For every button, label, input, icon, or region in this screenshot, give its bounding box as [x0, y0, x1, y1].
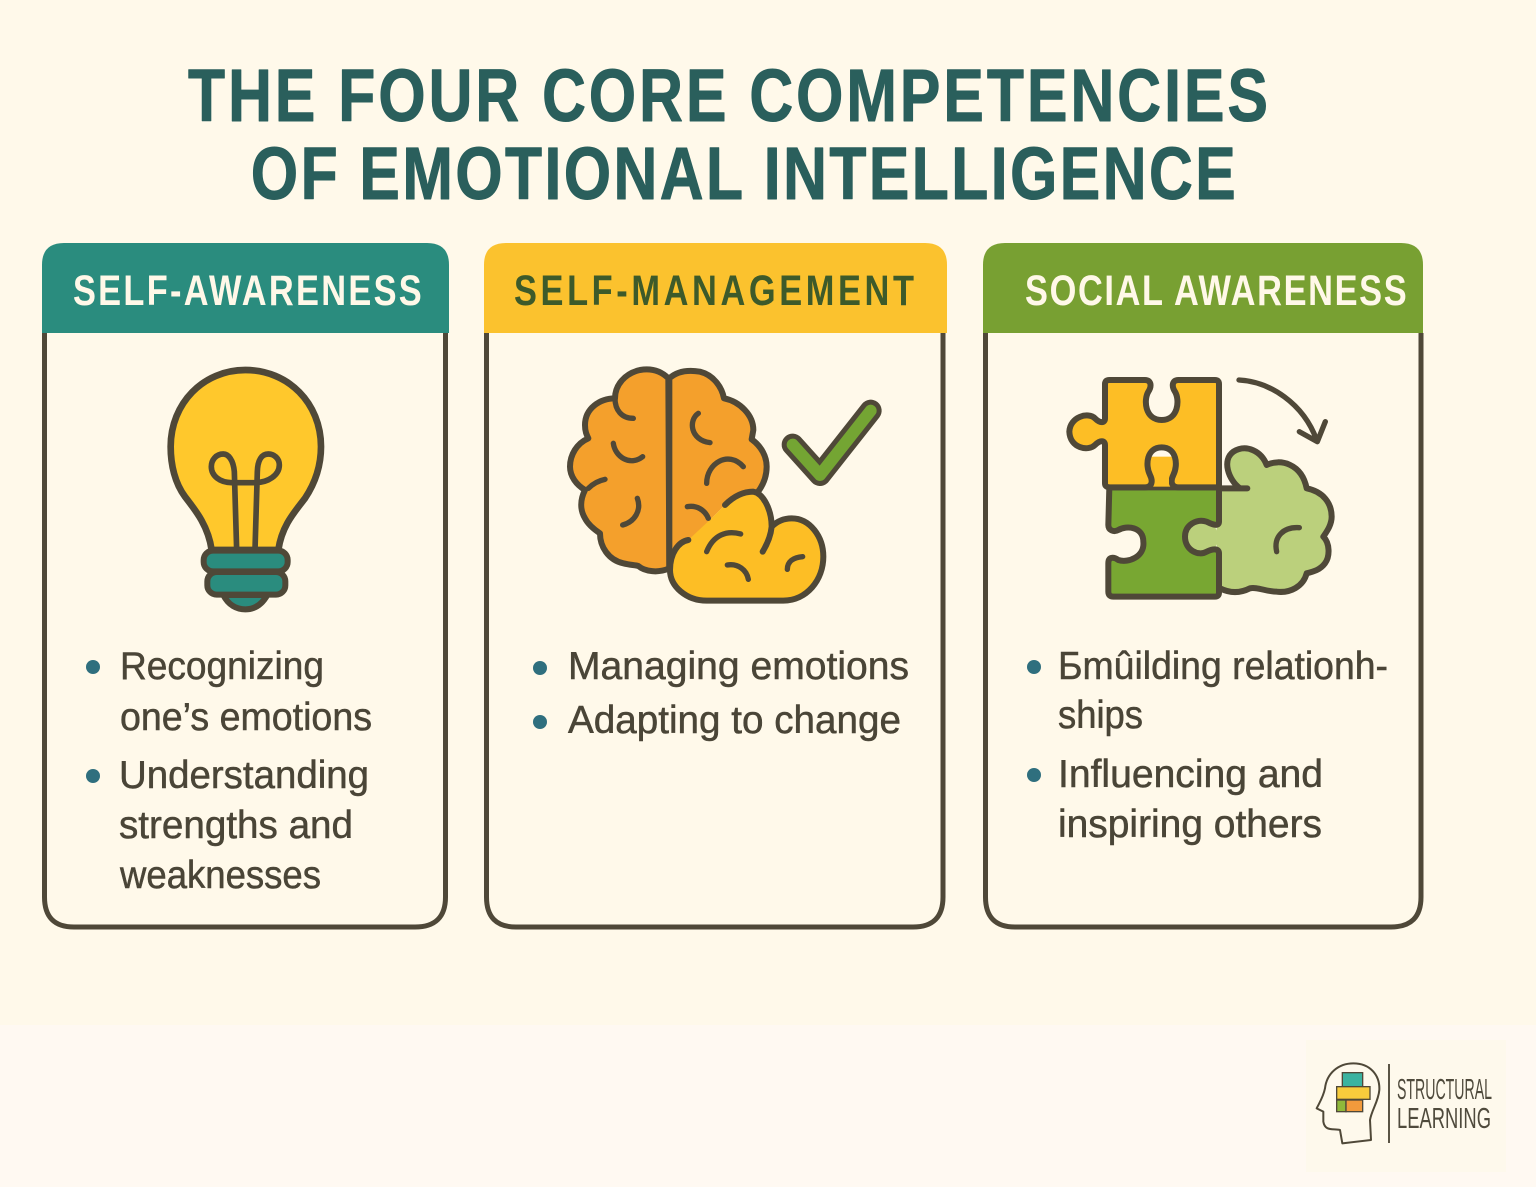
list: social awareness: ships — [1058, 694, 1143, 737]
panel: self-management — [484, 243, 947, 927]
list: social awareness — [1027, 645, 1388, 846]
list: self-management: Adapting to change — [568, 699, 901, 742]
panel: self-awareness — [42, 243, 449, 927]
list: self-awareness: weaknesses — [119, 854, 321, 897]
icon: brain with check mark — [570, 369, 871, 601]
list: self-awareness: strengths and — [119, 804, 353, 847]
header: self-awareness: SELF-AWARENESS — [73, 267, 422, 315]
title: THE FOUR CORE COMPETENCIES — [188, 55, 1268, 137]
light green brain piece — [1185, 448, 1332, 592]
list: social awareness: Бmûilding relationh- — [1058, 645, 1388, 688]
icon: head with blocks — [1317, 1063, 1379, 1143]
header: social awareness: SOCIAL AWARENESS — [1025, 267, 1407, 315]
arrow — [1239, 380, 1325, 442]
list: self-management — [533, 645, 909, 742]
icon: light bulb — [171, 370, 321, 609]
title: OF EMOTIONAL INTELLIGENCE — [251, 133, 1236, 215]
header: self-awareness — [42, 243, 449, 333]
header: self-management: SELF-MANAGEMENT — [514, 267, 914, 315]
list: self-management: Managing emotions — [568, 645, 909, 688]
check mark — [793, 411, 871, 475]
panel: social awareness — [983, 243, 1423, 927]
header: self-management — [484, 243, 947, 333]
icon: puzzle pieces and brain — [1069, 380, 1332, 597]
list: self-awareness: one’s emotions — [120, 696, 372, 739]
yellow puzzle piece — [1069, 380, 1219, 487]
list: social awareness: Influencing and — [1058, 753, 1323, 796]
list: self-awareness — [86, 645, 372, 897]
list: self-awareness: Understanding — [119, 754, 369, 797]
title — [188, 55, 1268, 215]
header: social awareness — [983, 243, 1423, 333]
logo wordmark — [1397, 1074, 1492, 1135]
list: social awareness: inspiring others — [1058, 803, 1322, 846]
list: self-awareness: Recognizing — [120, 645, 324, 688]
green puzzle piece — [1108, 487, 1219, 597]
logo: structural learning — [1306, 1040, 1506, 1172]
